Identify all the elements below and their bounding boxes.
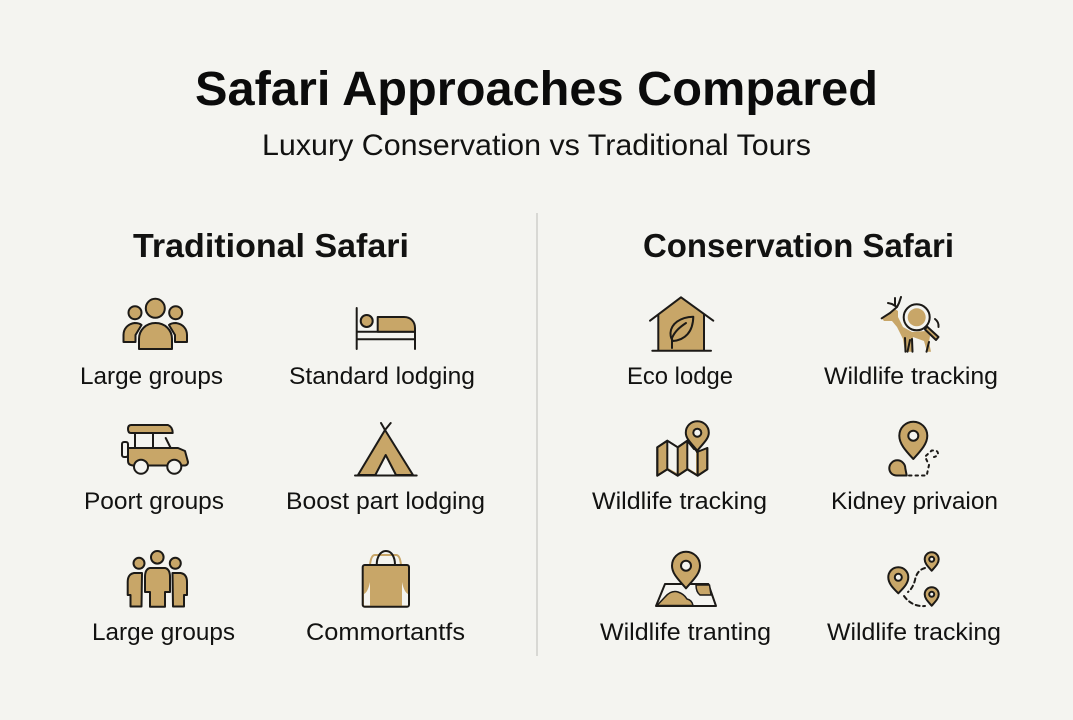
label: wildlife tracking: Wildlife tracking [592, 488, 767, 515]
label: wildlife tranting: Wildlife tranting [600, 619, 771, 646]
icon: map with pin [657, 421, 709, 476]
label: standard lodging: Standard lodging [289, 363, 475, 390]
label: eco lodge: Eco lodge [627, 363, 733, 390]
icon: eco lodge [650, 297, 713, 351]
icon: bed [357, 308, 415, 349]
icon: deer with magnifier [882, 297, 939, 352]
label: kidney privaion: Kidney privaion [831, 488, 998, 515]
label: boost part lodging: Boost part lodging [286, 488, 485, 515]
label: large groups: Large groups [92, 619, 235, 646]
panel: traditional safari [80, 299, 485, 646]
icon: shopping bag [363, 551, 409, 607]
label: commortantfs: Commortantfs [306, 619, 465, 646]
label: poort groups: Poort groups [84, 488, 224, 515]
label: large groups: Large groups [80, 363, 223, 390]
icon: large group of people [124, 299, 187, 349]
icon: safari jeep [122, 425, 188, 474]
label: wildlife tracking: Wildlife tracking [824, 363, 998, 390]
title: Safari Approaches Compared [195, 63, 878, 116]
label: wildlife tracking: Wildlife tracking [827, 619, 1001, 646]
heading: traditional safari: Traditional Safari [133, 227, 409, 264]
subtitle: Luxury Conservation vs Traditional Tours [262, 129, 811, 162]
panel: conservation safari [592, 297, 1001, 646]
heading: conservation safari: Conservation Safari [643, 227, 954, 264]
icon: tent [355, 423, 417, 476]
icon: pin with dotted route [889, 422, 938, 476]
icon: connected pins [888, 552, 939, 606]
icon: terrain map with pin [656, 552, 716, 606]
icon: standing group [128, 551, 187, 607]
